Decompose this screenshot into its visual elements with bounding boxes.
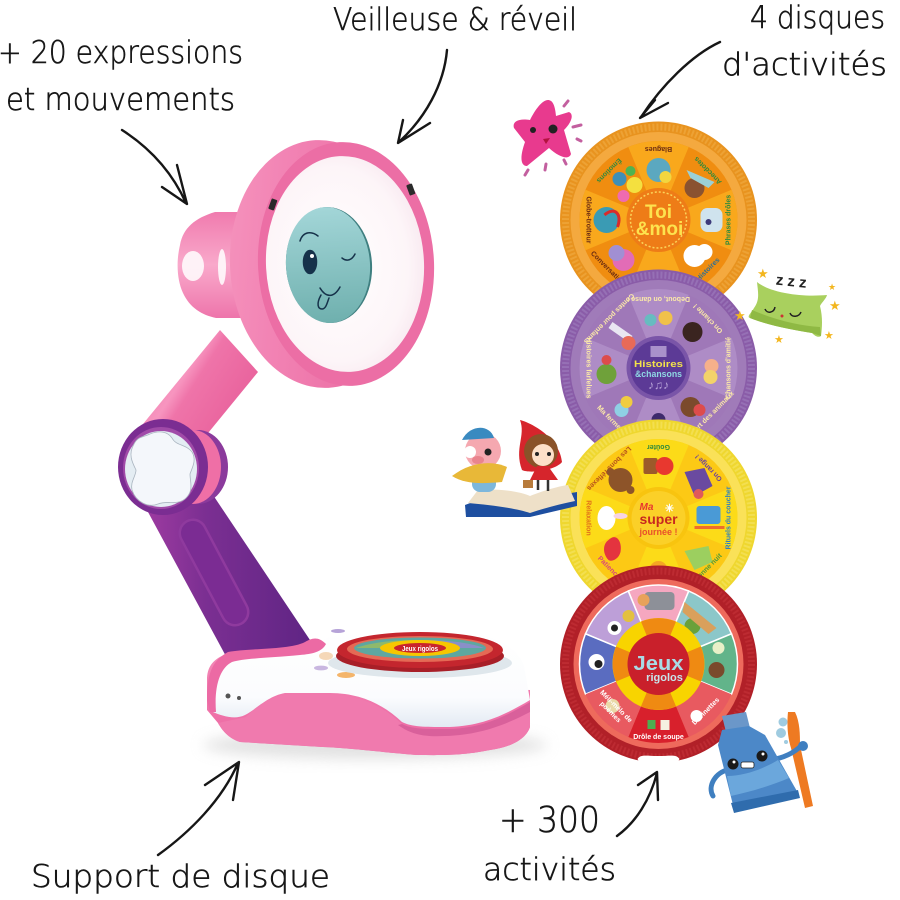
sticker: pig and red riding hood on a book: [452, 420, 577, 517]
disc 1 labels: Histoires: [695, 257, 721, 283]
disc 3: Ma super journée: [560, 420, 757, 616]
disc 3 labels: [584, 443, 732, 583]
disc 3 labels: On range !: [694, 453, 724, 482]
joint knob: [131, 432, 194, 505]
lamp: [118, 135, 547, 759]
disc 2 labels: Concert des animaux: [681, 390, 736, 445]
lamp sensors: [268, 183, 416, 211]
label: 300 activities: [483, 800, 616, 888]
arrow: to disc holder: [158, 762, 239, 855]
disc 4 labels: Drôle de soupe: [633, 734, 684, 741]
lamp joint: [118, 419, 228, 515]
disc 3 labels: Les bons réflexes: [585, 445, 632, 492]
disc 3 centre: super: [639, 511, 678, 527]
disc 1 centre: [626, 188, 690, 252]
label: four activity discs: [722, 0, 887, 83]
disc 4 labels: Méli-mélo de: [598, 689, 633, 724]
sticker: green pillow: ★: [828, 283, 836, 293]
sticker: green pillow: ★: [774, 333, 784, 346]
disc 4 labels: Devinettes: [691, 697, 721, 727]
sticker: toothpaste and toothbrush: [711, 712, 813, 813]
disc 1 labels: Émotions: [595, 156, 624, 185]
disc 2 centre: [626, 336, 690, 400]
base pink arch: [218, 695, 530, 755]
label: four activity discs: d'activités: [722, 47, 887, 83]
disc 3 centre: [628, 487, 690, 549]
base pink underside: [207, 655, 530, 755]
arrow: to lamp light: [398, 50, 447, 143]
disc 3 labels: Rituels du coucher: [726, 486, 732, 550]
pig: [452, 428, 507, 492]
disc 3 labels: Bonne nuit: [693, 552, 724, 583]
label: expressions: [0, 35, 243, 118]
sticker: green pillow: ★: [824, 329, 834, 342]
disc 4: Jeux rigolos: [560, 566, 757, 764]
disc 3 labels: Goûter: [647, 443, 670, 450]
label: four activity discs: 4 disques: [750, 0, 885, 36]
lamp base shadow: [203, 731, 547, 759]
disc 1 labels: Blagues: [645, 145, 672, 152]
sticker: green pillow: z z z: [775, 272, 807, 292]
disc 3 labels: Patience: [596, 555, 621, 581]
disc 3 centre: journée !: [638, 527, 678, 537]
disc 2 labels: Contes pour enfants: [582, 292, 635, 345]
disc 1 labels: Globe-trotteur: [584, 196, 592, 244]
tube: [711, 712, 808, 813]
lamp head body: [218, 135, 420, 393]
disc 2 labels: Ma ferme: [595, 405, 622, 431]
base speaker holes: [226, 694, 241, 700]
disc 4 labels: [598, 689, 721, 741]
sticker: pink star: [514, 100, 581, 175]
disc 1 labels: Conversations: [589, 250, 628, 290]
disc 2 centre: ♪♫♪: [648, 378, 669, 392]
base disc slot: [328, 632, 512, 678]
base pink collar: [207, 638, 326, 712]
base disc slot: Jeux rigolos: [402, 646, 438, 653]
disc 2 labels: Debout, on danse !: [627, 295, 690, 302]
disc 1: Toi et moi: [560, 122, 757, 318]
disc 2 labels: Chansons d'amitié: [726, 337, 732, 399]
disc 4 notch: [638, 756, 680, 764]
disc 1 centre: Toi: [645, 202, 672, 223]
base white top: [211, 629, 530, 727]
disc 1 labels: Phrases drôles: [726, 195, 732, 245]
lamp light panel: [260, 152, 430, 376]
label: 300 activities: + 300: [499, 800, 600, 841]
sticker: green pillow: ★: [734, 309, 746, 324]
label: disc holder: Support de disque: [31, 859, 330, 895]
lamp head back knob: [178, 212, 250, 318]
disc 4 centre: Jeux: [634, 653, 684, 675]
disc 2 labels: On chante !: [692, 302, 724, 334]
lamp head front ring: [252, 138, 440, 390]
book: [465, 485, 577, 517]
disc 4 centre: rigolos: [646, 672, 683, 684]
disc 1 labels: [584, 145, 732, 290]
disc 1 icons: [594, 158, 722, 271]
disc 3 icons: [598, 457, 724, 579]
disc 1 centre: &moi: [636, 219, 683, 240]
lamp base: [207, 629, 530, 755]
disc 4 inner ring: [612, 618, 704, 710]
disc 3 centre: ✳: [665, 503, 674, 515]
toothbrush: [776, 712, 813, 808]
disc 4 pictures: [588, 592, 724, 730]
label: night light and alarm: Veilleuse & réveil: [333, 2, 577, 38]
label: 300 activities: activités: [483, 852, 616, 888]
disc 4 wedges: [579, 585, 738, 694]
arrow: to lamp head: [122, 130, 187, 204]
disc 1 labels: Anecdotes: [693, 155, 723, 185]
lamp lower arm: [148, 495, 312, 665]
arrow: to discs: [640, 42, 720, 118]
sticker: green pillow: ★: [757, 267, 769, 282]
label: expressions: et mouvements: [6, 82, 235, 118]
base buttons: [314, 629, 355, 678]
lamp upper arm: [143, 330, 258, 438]
disc 2 centre: &chansons: [635, 369, 682, 379]
screen face: [300, 233, 355, 309]
sticker: green pillow: ★: [829, 299, 841, 314]
disc 2: Histoires et chansons: [560, 270, 757, 466]
sticker: green pillow: [734, 267, 841, 346]
disc 3 labels: Relaxation: [584, 500, 592, 536]
arrow: to activity disc: [617, 772, 658, 836]
disc 2 icons: [596, 311, 718, 427]
red riding hood: [519, 420, 562, 491]
disc 4 centre: [628, 633, 690, 695]
disc 2 labels: [582, 292, 736, 445]
disc 3 centre: Ma: [640, 502, 654, 513]
lamp screen: [282, 204, 376, 326]
disc 4 labels: poèmes: [598, 701, 622, 724]
disc 2 labels: Histoires farfelues: [584, 337, 592, 399]
disc 2 centre: Histoires: [634, 359, 683, 370]
label: expressions: + 20 expressions: [0, 35, 243, 71]
